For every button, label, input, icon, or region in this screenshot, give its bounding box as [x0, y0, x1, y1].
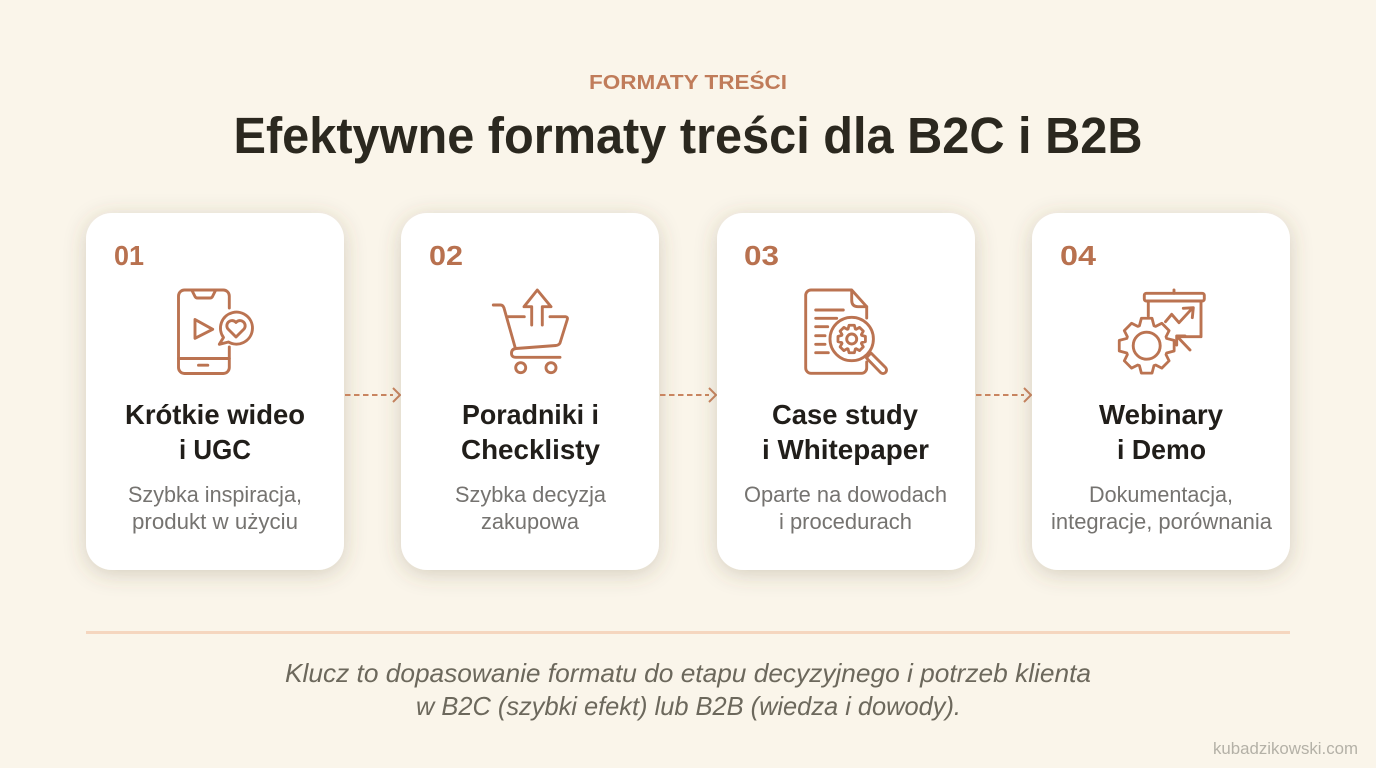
closing statement: w B2C (szybki efekt) lub B2B (wiedza i dowody). [416, 691, 961, 721]
card 04 heading: Webinary [1099, 399, 1224, 430]
card 03 description: Oparte na dowodach [744, 482, 947, 507]
card 01 description [128, 482, 302, 534]
number 02: 02 [429, 240, 463, 271]
panel: card 03 [717, 213, 975, 570]
icon: phone with video and heart [178, 290, 252, 374]
card 03 description: i procedurach [779, 509, 912, 534]
arrow: 03 to 04 [976, 388, 1031, 402]
title: Efektywne formaty treści dla B2C i B2B [234, 107, 1142, 164]
icon: gear and presentation board [1119, 290, 1204, 373]
card 02 description: zakupowa [481, 509, 580, 534]
card 02 description: Szybka decyzja [455, 482, 607, 507]
watermark: kubadzikowski.com [1213, 740, 1358, 758]
card 02 description [455, 482, 607, 534]
card 01 description: produkt w użyciu [132, 509, 298, 534]
card 01 description: Szybka inspiracja, [128, 482, 302, 507]
card 02 heading [461, 399, 601, 465]
eyebrow: section label: FORMATY TREŚCI [589, 70, 787, 94]
card 03 heading: i Whitepaper [762, 434, 929, 465]
panel: card 02 [401, 213, 659, 570]
closing statement: Klucz to dopasowanie formatu do etapu decyzyjnego i potrzeb klienta [285, 658, 1091, 688]
number 01: 01 [114, 240, 144, 271]
card 02 heading: Checklisty [461, 434, 601, 465]
card 01 heading: i UGC [179, 434, 251, 465]
card 01 heading [125, 399, 305, 465]
card 03 description [744, 482, 947, 534]
card 03 heading: Case study [772, 399, 919, 430]
card 01 heading: Krótkie wideo [125, 399, 305, 430]
closing statement [285, 658, 1091, 721]
card 04 heading [1099, 399, 1224, 465]
arrow: 01 to 02 [345, 388, 400, 402]
icon: document with magnifier and gear [806, 290, 887, 374]
icon: shopping cart with up arrow [493, 290, 567, 373]
card 04 description: Dokumentacja, [1089, 482, 1233, 507]
arrow: 02 to 03 [660, 388, 716, 402]
panel: card 01 [86, 213, 344, 570]
card 03 heading [762, 399, 929, 465]
card 02 heading: Poradniki i [462, 399, 599, 430]
number 04: 04 [1060, 240, 1096, 271]
card 04 description: integracje, porównania [1051, 509, 1273, 534]
panel: card 04 [1032, 213, 1290, 570]
card 04 heading: i Demo [1117, 434, 1206, 465]
number 03: 03 [744, 240, 779, 271]
card 04 description [1051, 482, 1273, 534]
